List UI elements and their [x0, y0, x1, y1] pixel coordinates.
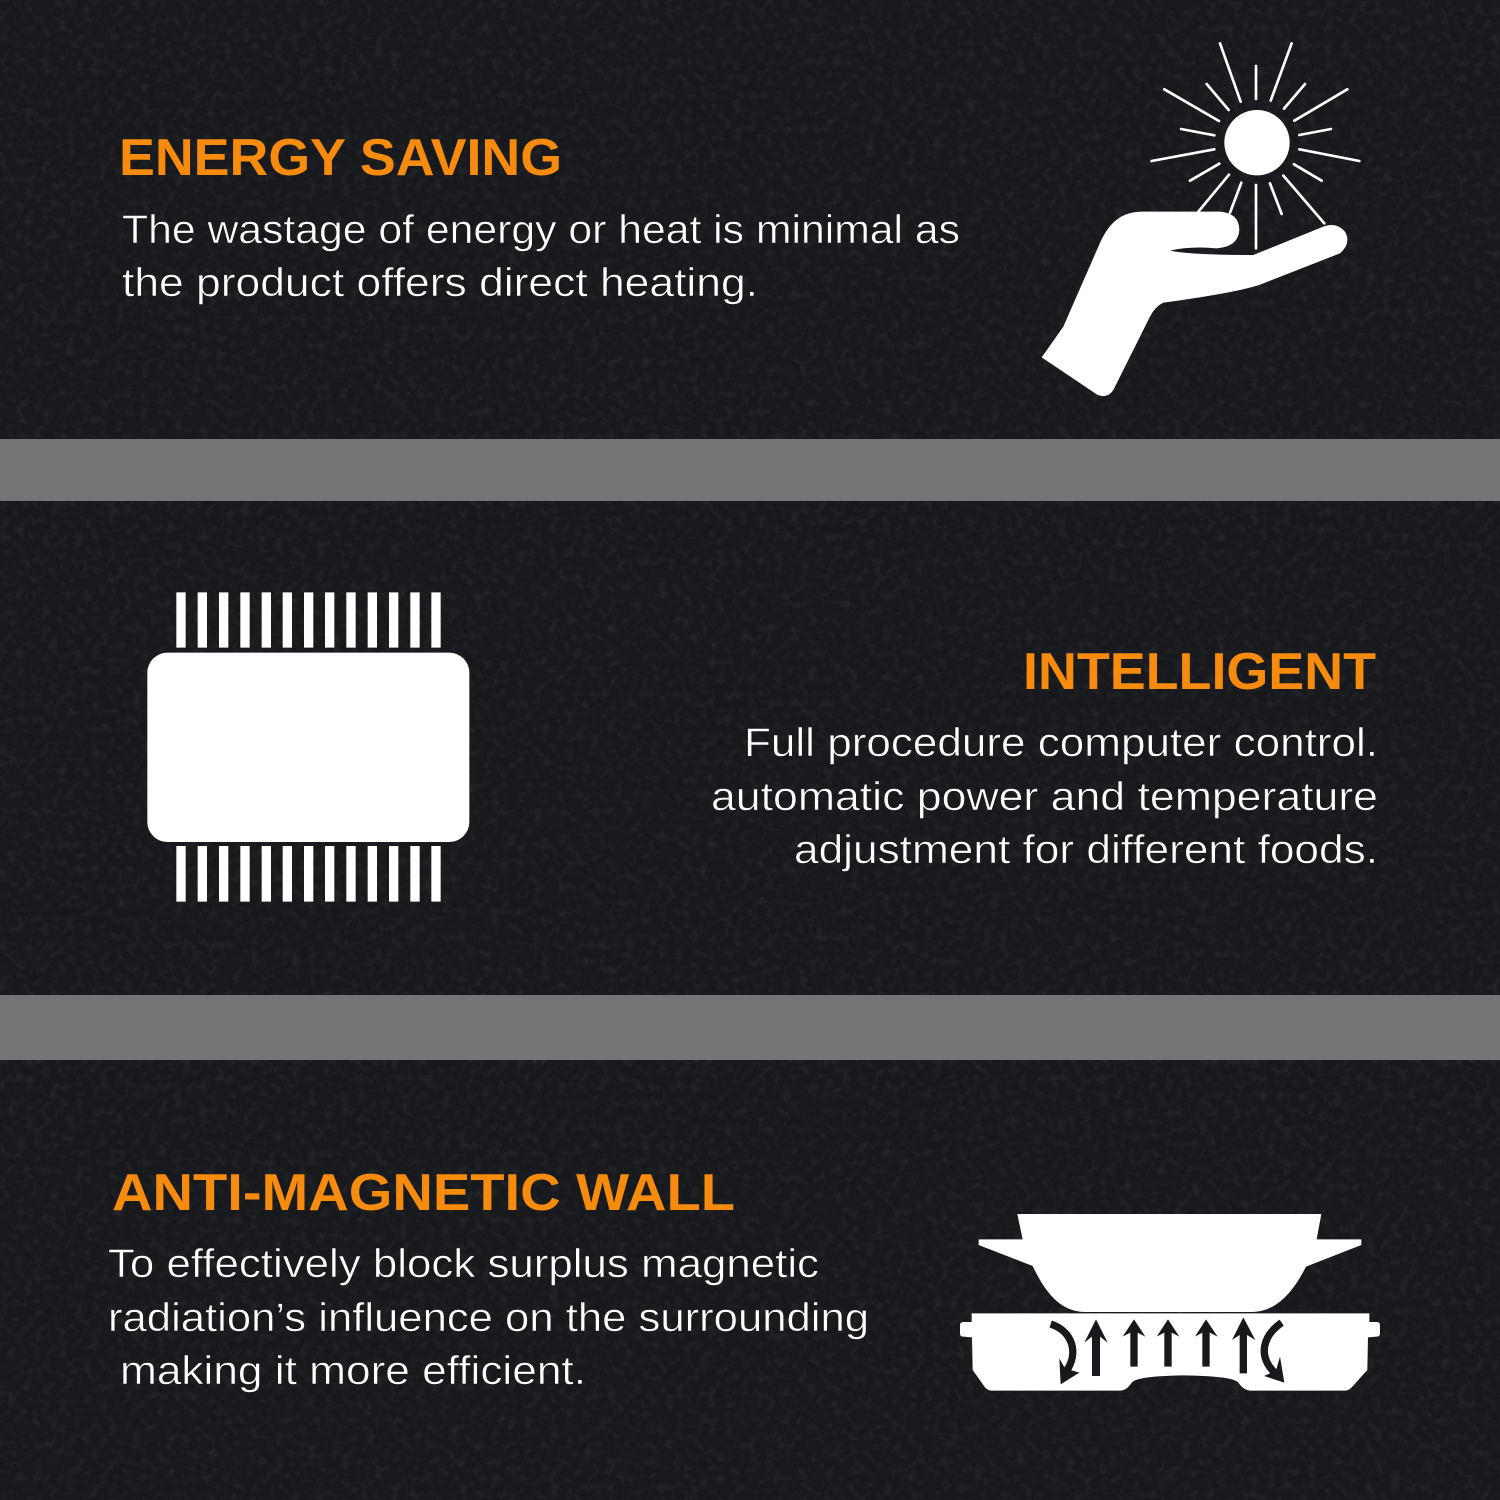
text block: intelligent description: Full procedure computer control.	[744, 721, 1378, 765]
panel: energy saving	[119, 43, 1359, 396]
heading: anti-magnetic wall: ANTI-MAGNETIC WALL	[112, 1164, 735, 1222]
text block: energy saving description: the product offers direct heating.	[122, 261, 758, 305]
text block: intelligent description: automatic power and temperature	[711, 775, 1378, 819]
icon: pan on induction cooker with heat arrows	[960, 1214, 1380, 1391]
icon: microchip	[147, 592, 469, 902]
text block: anti-magnetic wall description: radiation’s influence on the surrounding	[108, 1296, 869, 1340]
icon: hand holding sun	[1042, 43, 1359, 396]
panel: intelligent	[147, 592, 1378, 902]
text block: energy saving description	[122, 208, 960, 305]
panel: anti-magnetic wall	[108, 1164, 1380, 1393]
text block: anti-magnetic wall description: To effectively block surplus magnetic	[108, 1242, 819, 1286]
text block: intelligent description	[711, 721, 1378, 872]
text block: anti-magnetic wall description	[108, 1242, 869, 1393]
divider band: upper	[0, 439, 1500, 501]
heading: intelligent: INTELLIGENT	[1023, 643, 1376, 701]
heading: energy saving: ENERGY SAVING	[119, 129, 562, 187]
divider band: lower	[0, 995, 1500, 1060]
text block: energy saving description: The wastage of energy or heat is minimal as	[122, 208, 960, 252]
text block: intelligent description: adjustment for different foods.	[794, 828, 1378, 872]
text block: anti-magnetic wall description: making it more efficient.	[120, 1349, 586, 1393]
